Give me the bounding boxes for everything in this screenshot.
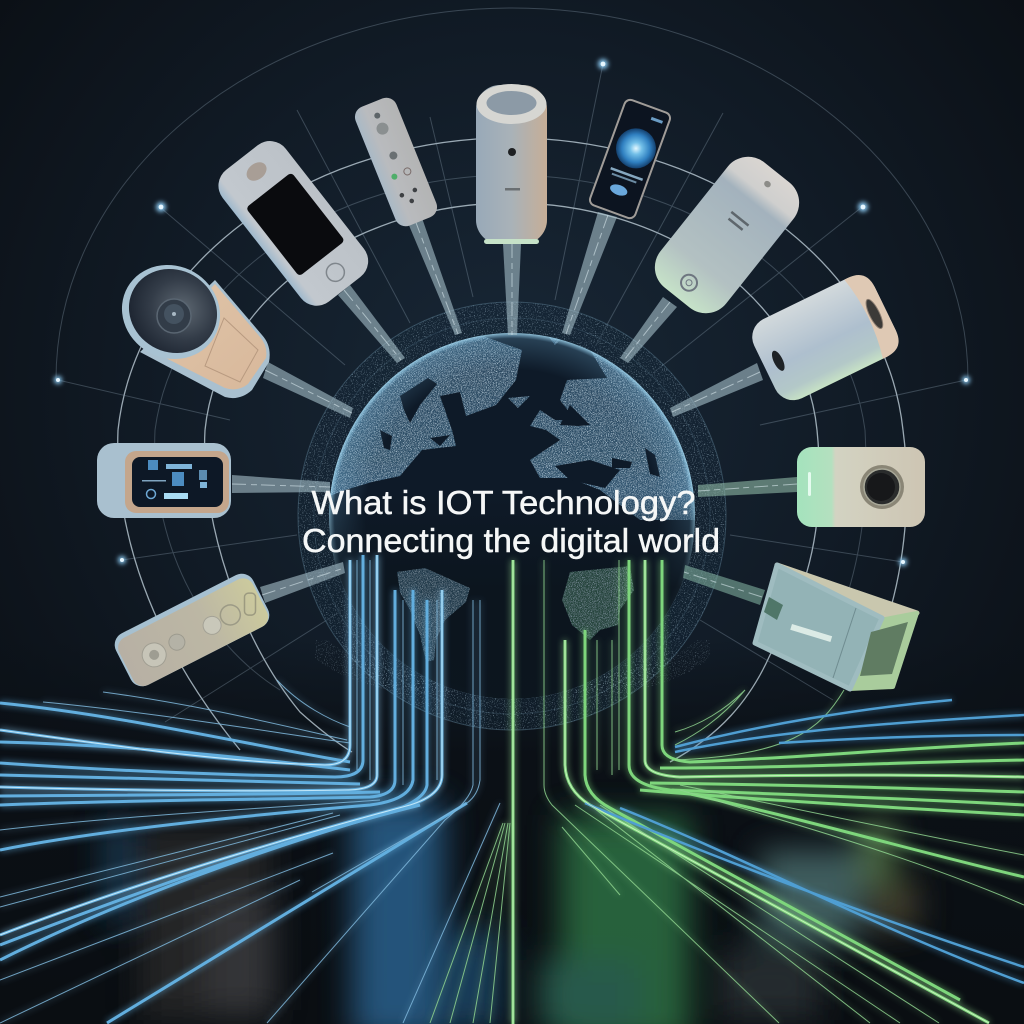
device: handheld tablet: [210, 133, 376, 314]
land holes: inland seas: [380, 378, 660, 488]
southern continents: [397, 566, 634, 662]
device: camera: [105, 247, 270, 398]
device: touch display panel: [97, 443, 231, 518]
connection beams: [232, 212, 797, 605]
green data lines glow: [430, 560, 1024, 1024]
lower fade: [325, 490, 700, 705]
device: cylinder hub: [644, 146, 810, 324]
device: green box: [755, 565, 917, 689]
globe: [320, 332, 705, 705]
globe halo: [298, 302, 726, 730]
title: [302, 485, 720, 560]
green data lines: [430, 560, 1024, 1024]
device: remote control: [352, 94, 440, 230]
device: white capsule sensor: [745, 269, 905, 407]
device: smart speaker: [476, 84, 547, 244]
title: What is IOT Technology?: [312, 485, 696, 522]
orbit rings and network links: [56, 8, 968, 762]
title: Connecting the digital world: [302, 523, 720, 560]
blue data lines glow: [0, 555, 500, 1023]
device: game controller remote: [110, 569, 274, 691]
continents: [320, 332, 705, 520]
device: smartphone: [588, 98, 672, 220]
network node dots: [54, 59, 970, 566]
device: green projector: [797, 447, 925, 527]
blue data lines: [0, 555, 500, 1023]
floor reflections: [105, 800, 918, 1024]
